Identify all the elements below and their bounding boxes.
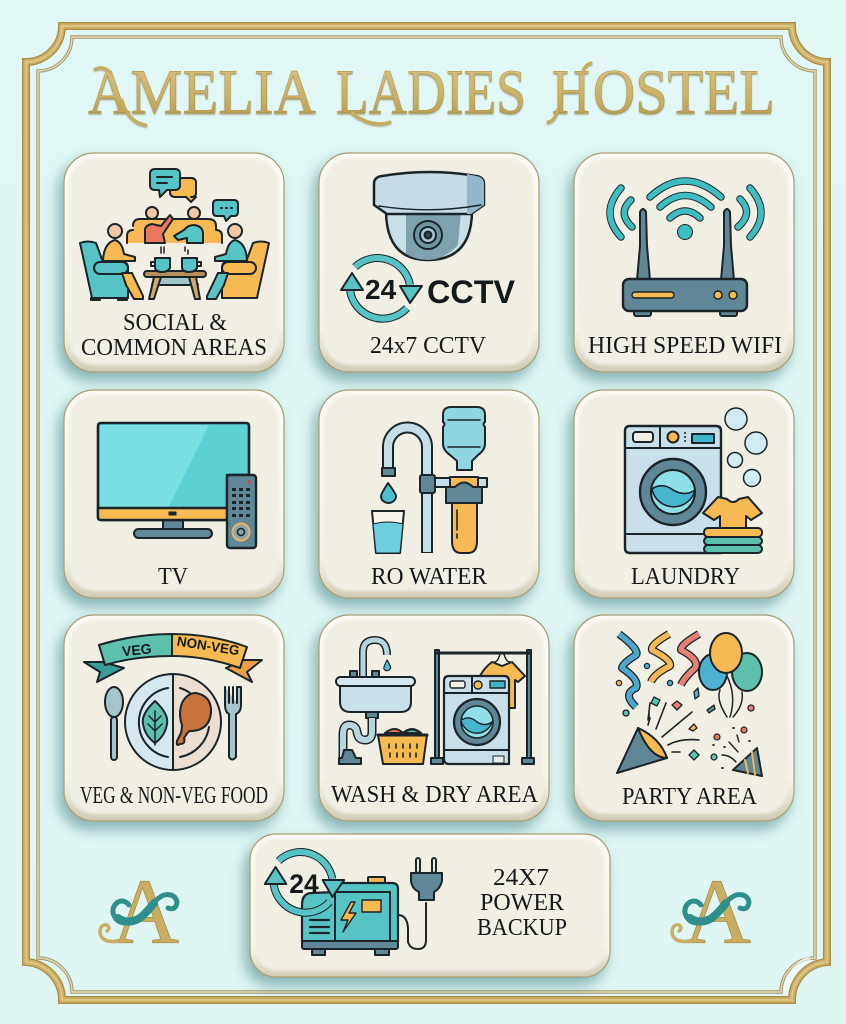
icon: balloons bbox=[699, 633, 762, 717]
panel: party area bbox=[574, 615, 794, 821]
label: VEG & NON-VEG FOOD bbox=[80, 783, 268, 809]
logo: left monogram: A bbox=[112, 861, 179, 964]
icon: television and remote bbox=[98, 423, 256, 548]
label: 24X7 bbox=[493, 865, 549, 891]
label line 2: COMMON AREAS bbox=[81, 335, 267, 361]
icon: faucet, bottle, filter and glass bbox=[372, 407, 487, 553]
panel: wash and dry area bbox=[319, 615, 549, 821]
panel: high speed wifi bbox=[574, 153, 794, 372]
icon text: CCTV: CCTV bbox=[427, 274, 516, 310]
icon: wifi router bbox=[610, 181, 761, 316]
icon: drying rack, shirt and washer bbox=[431, 650, 534, 764]
panel: laundry bbox=[574, 390, 794, 598]
label: LAUNDRY bbox=[631, 564, 740, 590]
icon: dome camera bbox=[374, 172, 484, 260]
title: AMELIA bbox=[88, 56, 316, 127]
label: HIGH SPEED WIFI bbox=[588, 333, 782, 359]
logo: right monogram: A bbox=[684, 861, 751, 964]
title: LADIES bbox=[336, 56, 526, 127]
title: OSTEL bbox=[593, 56, 775, 127]
icon: plate, spoon and fork bbox=[105, 674, 241, 770]
icon: 24 hour cycle bbox=[341, 258, 422, 319]
label bbox=[477, 865, 567, 941]
icon: 24 hour cycle bbox=[265, 852, 344, 913]
icon: 24 hour cycle: 24 bbox=[289, 869, 319, 899]
label: RO WATER bbox=[371, 564, 487, 590]
panel: tv bbox=[64, 390, 284, 598]
label: POWER bbox=[480, 890, 564, 916]
icon: ribbon banner: VEG bbox=[121, 640, 152, 659]
icon: sink and basket bbox=[336, 640, 427, 764]
icon: ribbon banner bbox=[84, 634, 262, 682]
panel: ro water bbox=[319, 390, 539, 598]
icon: 24 hour cycle: 24 bbox=[365, 274, 397, 305]
icon: ribbon banner: NON-VEG bbox=[176, 634, 240, 658]
label: BACKUP bbox=[477, 915, 567, 941]
icon: generator bbox=[302, 877, 398, 955]
label: PARTY AREA bbox=[622, 784, 758, 810]
panel: veg and non-veg food bbox=[64, 615, 284, 821]
icon: party popper and hat with confetti bbox=[616, 663, 762, 776]
panel: 24x7 power backup bbox=[250, 834, 610, 977]
panel: cctv bbox=[319, 153, 539, 372]
icon: streamers bbox=[619, 634, 699, 707]
title bbox=[88, 56, 775, 127]
label: SOCIAL & bbox=[123, 310, 227, 336]
label: 24x7 CCTV bbox=[370, 333, 487, 359]
panel: social and common areas bbox=[64, 153, 284, 372]
icon: power plug and cable bbox=[398, 858, 442, 949]
label: WASH & DRY AREA bbox=[331, 782, 539, 808]
icon: washing machine, bubbles, clothes bbox=[625, 408, 767, 553]
icon: people talking on sofas bbox=[80, 169, 269, 300]
title: H bbox=[552, 56, 590, 127]
label: TV bbox=[158, 564, 189, 590]
